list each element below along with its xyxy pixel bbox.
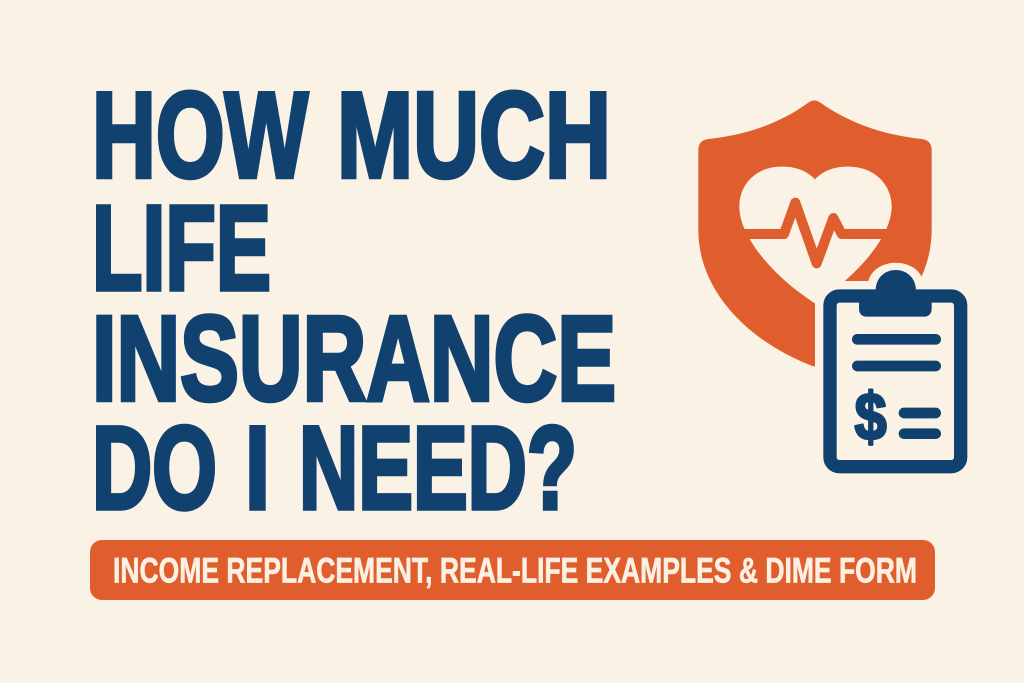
title line: Do I Need?: DO bbox=[92, 402, 217, 534]
banner background bbox=[90, 540, 935, 600]
title line: Do I Need?: I bbox=[245, 402, 270, 534]
title line: Do I Need? bbox=[92, 402, 577, 534]
subtitle banner bbox=[90, 540, 935, 600]
title line: Do I Need?: NEED? bbox=[299, 402, 577, 534]
title line: How Much bbox=[92, 67, 611, 203]
title bbox=[92, 67, 616, 534]
title line: How Much: HOW bbox=[92, 67, 309, 203]
icon: dollar sign: $ bbox=[855, 380, 887, 454]
icon: shield bbox=[698, 100, 932, 366]
icon: form lines bbox=[857, 339, 936, 434]
title line: How Much: MUCH bbox=[337, 67, 611, 203]
icon: shield and clipboard bbox=[698, 100, 976, 482]
icon: heart bbox=[739, 167, 892, 303]
icon: clipboard halo bbox=[815, 263, 976, 482]
icon: clipboard clip bbox=[859, 270, 932, 317]
title line: Life: LIFE bbox=[92, 180, 271, 316]
icon: heartbeat line bbox=[738, 203, 893, 263]
title line: Insurance: INSURANCE bbox=[92, 290, 616, 426]
icon: clipboard board bbox=[830, 296, 961, 467]
